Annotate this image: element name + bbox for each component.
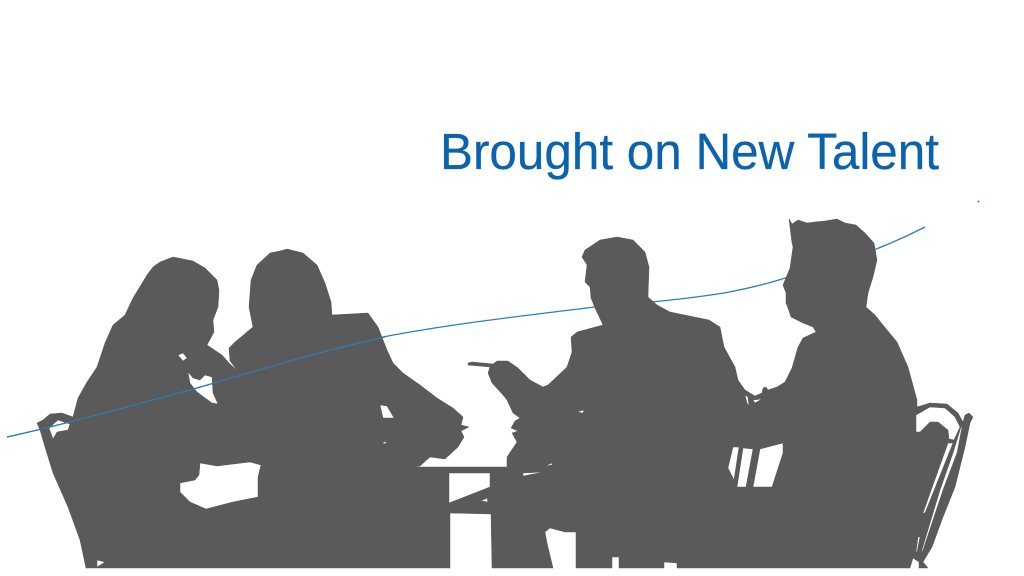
growth line behind the silhouettes xyxy=(7,227,925,437)
marker dot xyxy=(978,200,980,202)
growth line over the seated figures xyxy=(7,337,385,437)
silhouette: four people meeting around a table xyxy=(37,219,973,568)
title: Brought on New Talent xyxy=(440,123,939,180)
